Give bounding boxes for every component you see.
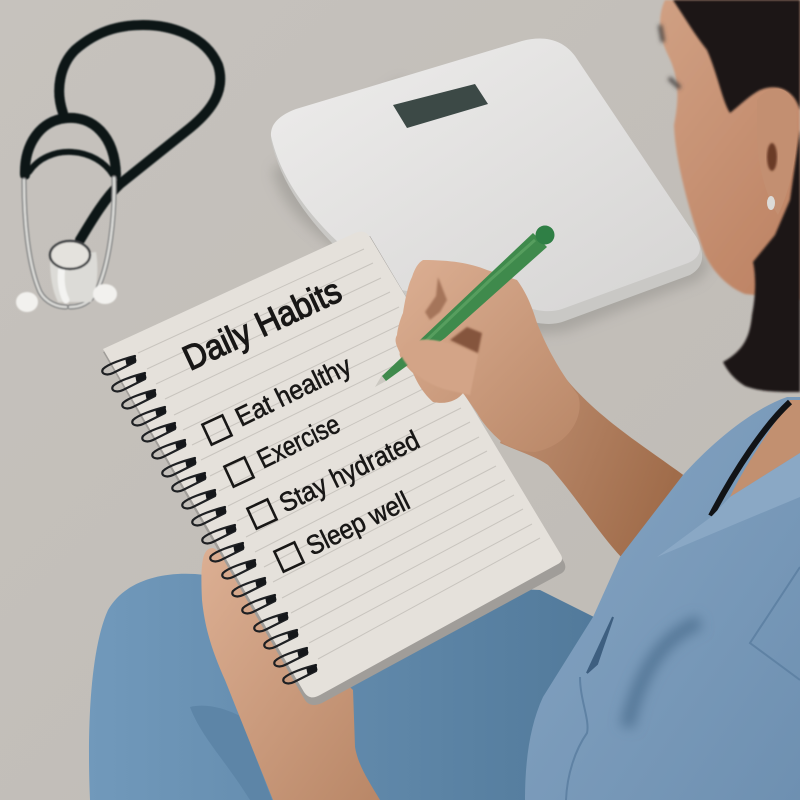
neck skin xyxy=(730,400,800,497)
checklist item: Stay hydrated: Stay hydrated xyxy=(274,425,424,518)
eye and brow xyxy=(660,25,680,88)
collar xyxy=(657,453,800,557)
neckline xyxy=(711,402,790,516)
icon: stethoscope xyxy=(16,25,220,312)
pocket slit xyxy=(587,617,613,673)
face xyxy=(660,0,800,300)
notebook xyxy=(102,232,565,705)
icon: bathroom scale xyxy=(271,39,712,335)
heading: Daily Habits: Daily Habits xyxy=(177,271,347,378)
ear with earring xyxy=(757,89,797,215)
legs in blue scrub trousers xyxy=(89,574,594,800)
left hand holding notebook xyxy=(201,548,380,800)
finger crease shadows xyxy=(425,277,447,320)
writing hand xyxy=(396,260,580,452)
spiral binding xyxy=(102,356,317,683)
checklist item: Exercise xyxy=(224,409,345,487)
checklist item: Exercise: Exercise xyxy=(252,409,345,474)
checklist item: Eat healthy xyxy=(202,350,356,445)
forearm xyxy=(500,360,690,558)
checklist item: Eat healthy: Eat healthy xyxy=(230,350,356,432)
ruled lines xyxy=(138,249,540,659)
checklist item: Sleep well: Sleep well xyxy=(301,486,414,561)
sleeve fold shadow xyxy=(627,622,700,727)
scale display xyxy=(393,84,488,128)
scrub top xyxy=(525,397,800,800)
finger over pen xyxy=(400,340,478,395)
placket seam xyxy=(566,567,800,800)
icon: green pen xyxy=(375,226,554,387)
checklist item: Stay hydrated xyxy=(247,425,424,529)
trouser fold xyxy=(190,706,272,800)
checklist item: Sleep well xyxy=(274,486,414,572)
hair xyxy=(673,0,800,392)
palm crease xyxy=(450,327,482,353)
